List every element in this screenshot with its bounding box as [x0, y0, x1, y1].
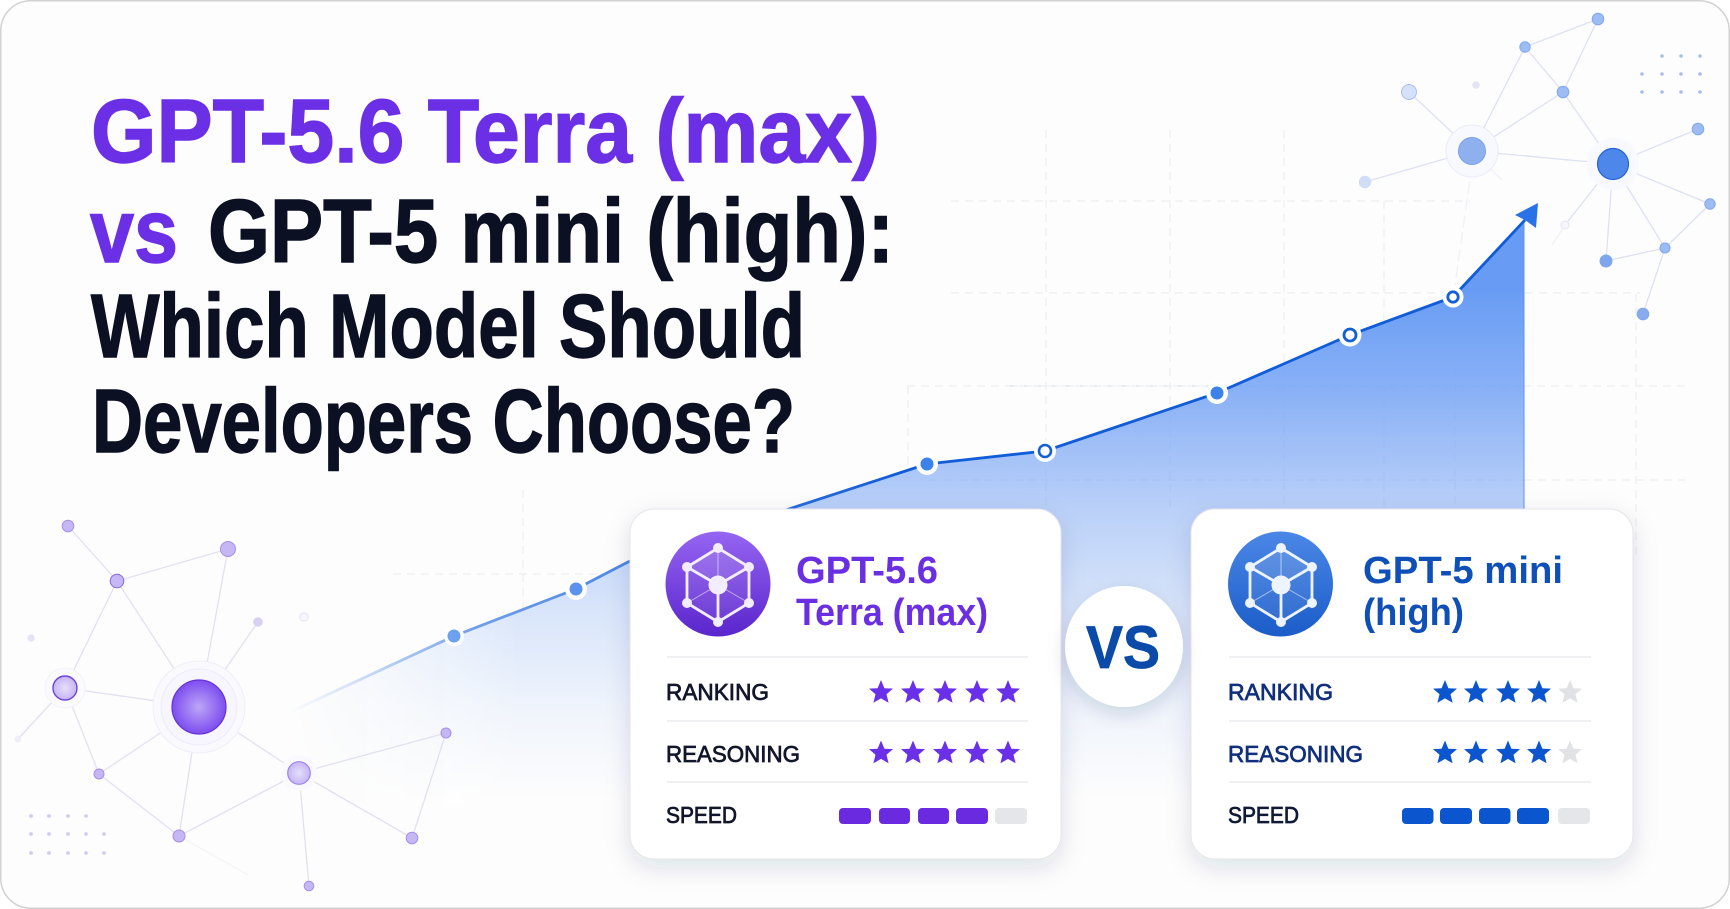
speed row	[666, 802, 1027, 828]
ranking row	[1228, 679, 1582, 705]
chart point 3	[916, 453, 938, 475]
ranking row	[666, 679, 1020, 705]
speed row	[1228, 802, 1590, 828]
ranking row: RANKING	[666, 679, 769, 705]
reasoning row: REASONING	[666, 741, 800, 767]
panel: GPT-5.6 Terra card	[630, 509, 1061, 859]
chart point 4	[1034, 440, 1056, 462]
chart point 2	[565, 578, 587, 600]
VS badge	[1065, 586, 1183, 707]
title: Developers Choose?	[92, 372, 795, 472]
network: top right	[1359, 13, 1715, 320]
reasoning row: REASONING	[1228, 741, 1363, 767]
title	[90, 82, 894, 472]
icon: purple hexagon network	[666, 532, 770, 636]
ranking row: RANKING	[1228, 679, 1333, 705]
card name	[796, 550, 988, 634]
card name: GPT-5 mini	[1363, 550, 1563, 592]
VS badge: VS	[1086, 614, 1160, 681]
speed row: SPEED	[666, 802, 737, 828]
card name: Terra (max)	[796, 592, 988, 634]
title: vs	[90, 182, 178, 282]
title: GPT-5 mini (high):	[208, 182, 894, 282]
title: Which Model Should	[91, 277, 805, 377]
icon: blue hexagon network	[1228, 532, 1333, 636]
card name: GPT-5.6	[796, 550, 938, 592]
chart point 6	[1338, 324, 1362, 346]
title: GPT-5.6 Terra (max)	[91, 82, 880, 182]
arrow head	[1515, 203, 1538, 228]
area chart	[302, 203, 1538, 748]
dot grid: bottom left	[29, 814, 106, 855]
chart right edge	[1523, 222, 1525, 510]
card name: (high)	[1363, 592, 1464, 634]
chart point 5	[1206, 382, 1228, 404]
chart area fill	[378, 224, 1524, 748]
network: bottom left	[15, 520, 451, 891]
card name	[1363, 550, 1563, 634]
chart grid	[393, 130, 1685, 640]
dot grid: top right	[1640, 54, 1702, 94]
chart inner grid overlay	[930, 300, 1524, 510]
chart point 7	[1442, 286, 1464, 308]
reasoning row	[1228, 740, 1582, 767]
chart trend line	[290, 220, 1525, 712]
reasoning row	[666, 740, 1020, 767]
chart point 1	[444, 626, 464, 646]
panel: GPT-5 mini card	[1191, 509, 1633, 859]
speed row: SPEED	[1228, 802, 1299, 828]
